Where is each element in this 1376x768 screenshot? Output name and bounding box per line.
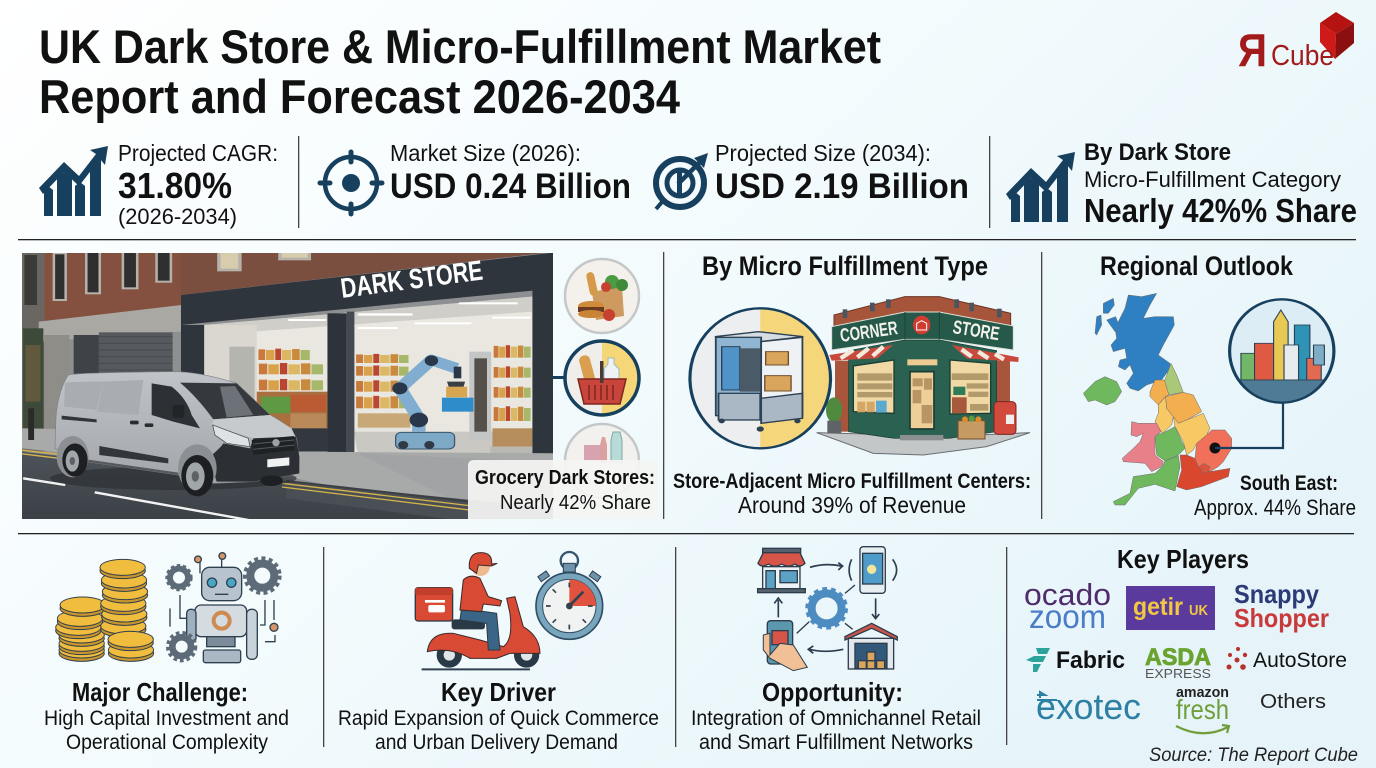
text: major challenge [44,677,289,754]
icon: omnichannel network [758,547,897,671]
shelves [229,347,255,400]
panel: regional outlook [1083,251,1356,520]
logo: Snappy Shopper [1234,579,1329,633]
logo: getir UK: UK [1189,602,1208,619]
text: opportunity: Integration of Omnichannel Retail [691,707,981,730]
panel: key players [1024,544,1347,733]
road [21,452,469,522]
panel: dark store photo [21,248,556,522]
logo: exotec: exotec [1036,686,1141,727]
logo: Snappy Shopper: Snappy [1234,579,1319,609]
callout: grocery dark stores: Grocery Dark Stores: [475,466,655,489]
stat: market size 2026: USD 0.24 Billion [390,167,631,206]
icon: micro fulfillment unit [690,308,833,448]
logo: amazon fresh: fresh [1176,694,1229,725]
stat: projected size 2034: USD 2.19 Billion [715,167,969,206]
pavement [22,428,553,498]
panel: micro fulfillment type [673,251,1031,518]
text: key driver [338,677,659,754]
logo: ASDA Express: ASDA [1145,644,1211,671]
stat: dark store category: By Dark Store [1084,139,1231,166]
stat: projected CAGR [39,140,278,229]
icon: dairy circle [565,424,639,498]
logo: Fabric [1026,647,1125,674]
icon: city skyline [1227,299,1336,403]
ground floor left [39,305,181,342]
text: major challenge: Major Challenge: [72,677,248,707]
logo: RCube [1238,12,1354,76]
sign: DARK STORE: DARK STORE [339,255,485,304]
title: Report and Forecast 2026-2034 [39,70,680,123]
text: key driver: Rapid Expansion of Quick Commerce [338,707,659,730]
map: UK regions [1083,293,1232,505]
building brick [21,252,44,452]
text: key driver: Key Driver [441,677,556,707]
stat: market size 2026: Market Size (2026): [390,140,581,166]
text: opportunity: Opportunity: [762,677,903,707]
panel: major challenge [44,553,289,754]
icon: corner store [817,297,1030,455]
panel: key driver [338,552,659,754]
logo: getir UK [1126,586,1215,630]
logo: Fabric: Fabric [1056,647,1125,674]
heading: Regional Outlook [1100,251,1294,281]
right fridge/shelves [469,352,491,440]
text: key driver: and Urban Delivery Demand [375,731,618,754]
logo: ocado zoom [1024,577,1111,635]
logo: RCube: Cube [1271,40,1334,72]
icon: food bag circle [565,259,639,333]
stat: projected size 2034 [656,140,969,209]
text: opportunity: and Smart Fulfillment Networks [699,731,973,754]
pillars [181,325,204,375]
van [50,372,299,496]
logo: ocado zoom: zoom [1029,598,1106,635]
pointer: South East [1210,402,1283,454]
caption: Store-Adjacent Micro Fulfillment Centers: [673,469,1031,493]
callout: grocery dark stores [468,460,658,519]
logo: others: Others [1260,691,1326,713]
icon: target [320,152,382,214]
interior [204,297,532,458]
panel: opportunity [691,547,981,754]
stat: projected CAGR: (2026-2034) [118,204,237,229]
logo: AutoStore: AutoStore [1253,649,1347,672]
icon: target with arrow [656,153,708,209]
stat: dark store category: Micro-Fulfillment Category [1084,167,1341,192]
store signage: CORNER [839,318,899,347]
store signage [839,317,1001,347]
text: major challenge: Operational Complexity [66,731,268,754]
icon: grocery basket circle [565,340,642,416]
logo: getir UK: getir [1133,593,1183,621]
store signage: STORE [951,317,1001,345]
logo: RCube: Я [1238,24,1267,76]
icon: coins and robot [56,553,280,663]
source: Source: The Report Cube [1149,745,1358,766]
title [39,20,881,123]
stat: market size 2026 [320,140,631,214]
heading: By Micro Fulfillment Type [702,251,988,281]
stat: dark store category [1006,139,1357,229]
panel: micro fulfillment type: Around 39% of Revenue [738,492,966,518]
stat: projected CAGR: Projected CAGR: [118,140,278,166]
caption: South East: [1240,471,1338,495]
icon: delivery scooter [415,553,540,669]
heading: Key Players [1117,544,1249,574]
stat: projected CAGR: 31.80% [118,165,232,206]
text: opportunity [691,677,981,754]
logo: amazon fresh [1176,684,1229,733]
connector [553,376,565,379]
robot arm [392,355,474,449]
title: UK Dark Store & Micro-Fulfillment Market [39,20,881,73]
icon: growth chart [1006,152,1075,222]
text: major challenge: High Capital Investment and [44,707,289,730]
callout: grocery dark stores: Nearly 42% Share [500,491,651,514]
logo: Snappy Shopper: Shopper [1234,603,1329,633]
stat: projected size 2034: Projected Size (2034): [715,140,931,166]
logo: amazon fresh: amazon [1176,684,1229,701]
icon: stopwatch [536,552,603,639]
fascia [181,252,556,325]
logo: ASDA Express: EXPRESS [1145,666,1211,681]
logo: ocado zoom: ocado [1024,577,1111,612]
icon: growth chart [39,146,108,216]
